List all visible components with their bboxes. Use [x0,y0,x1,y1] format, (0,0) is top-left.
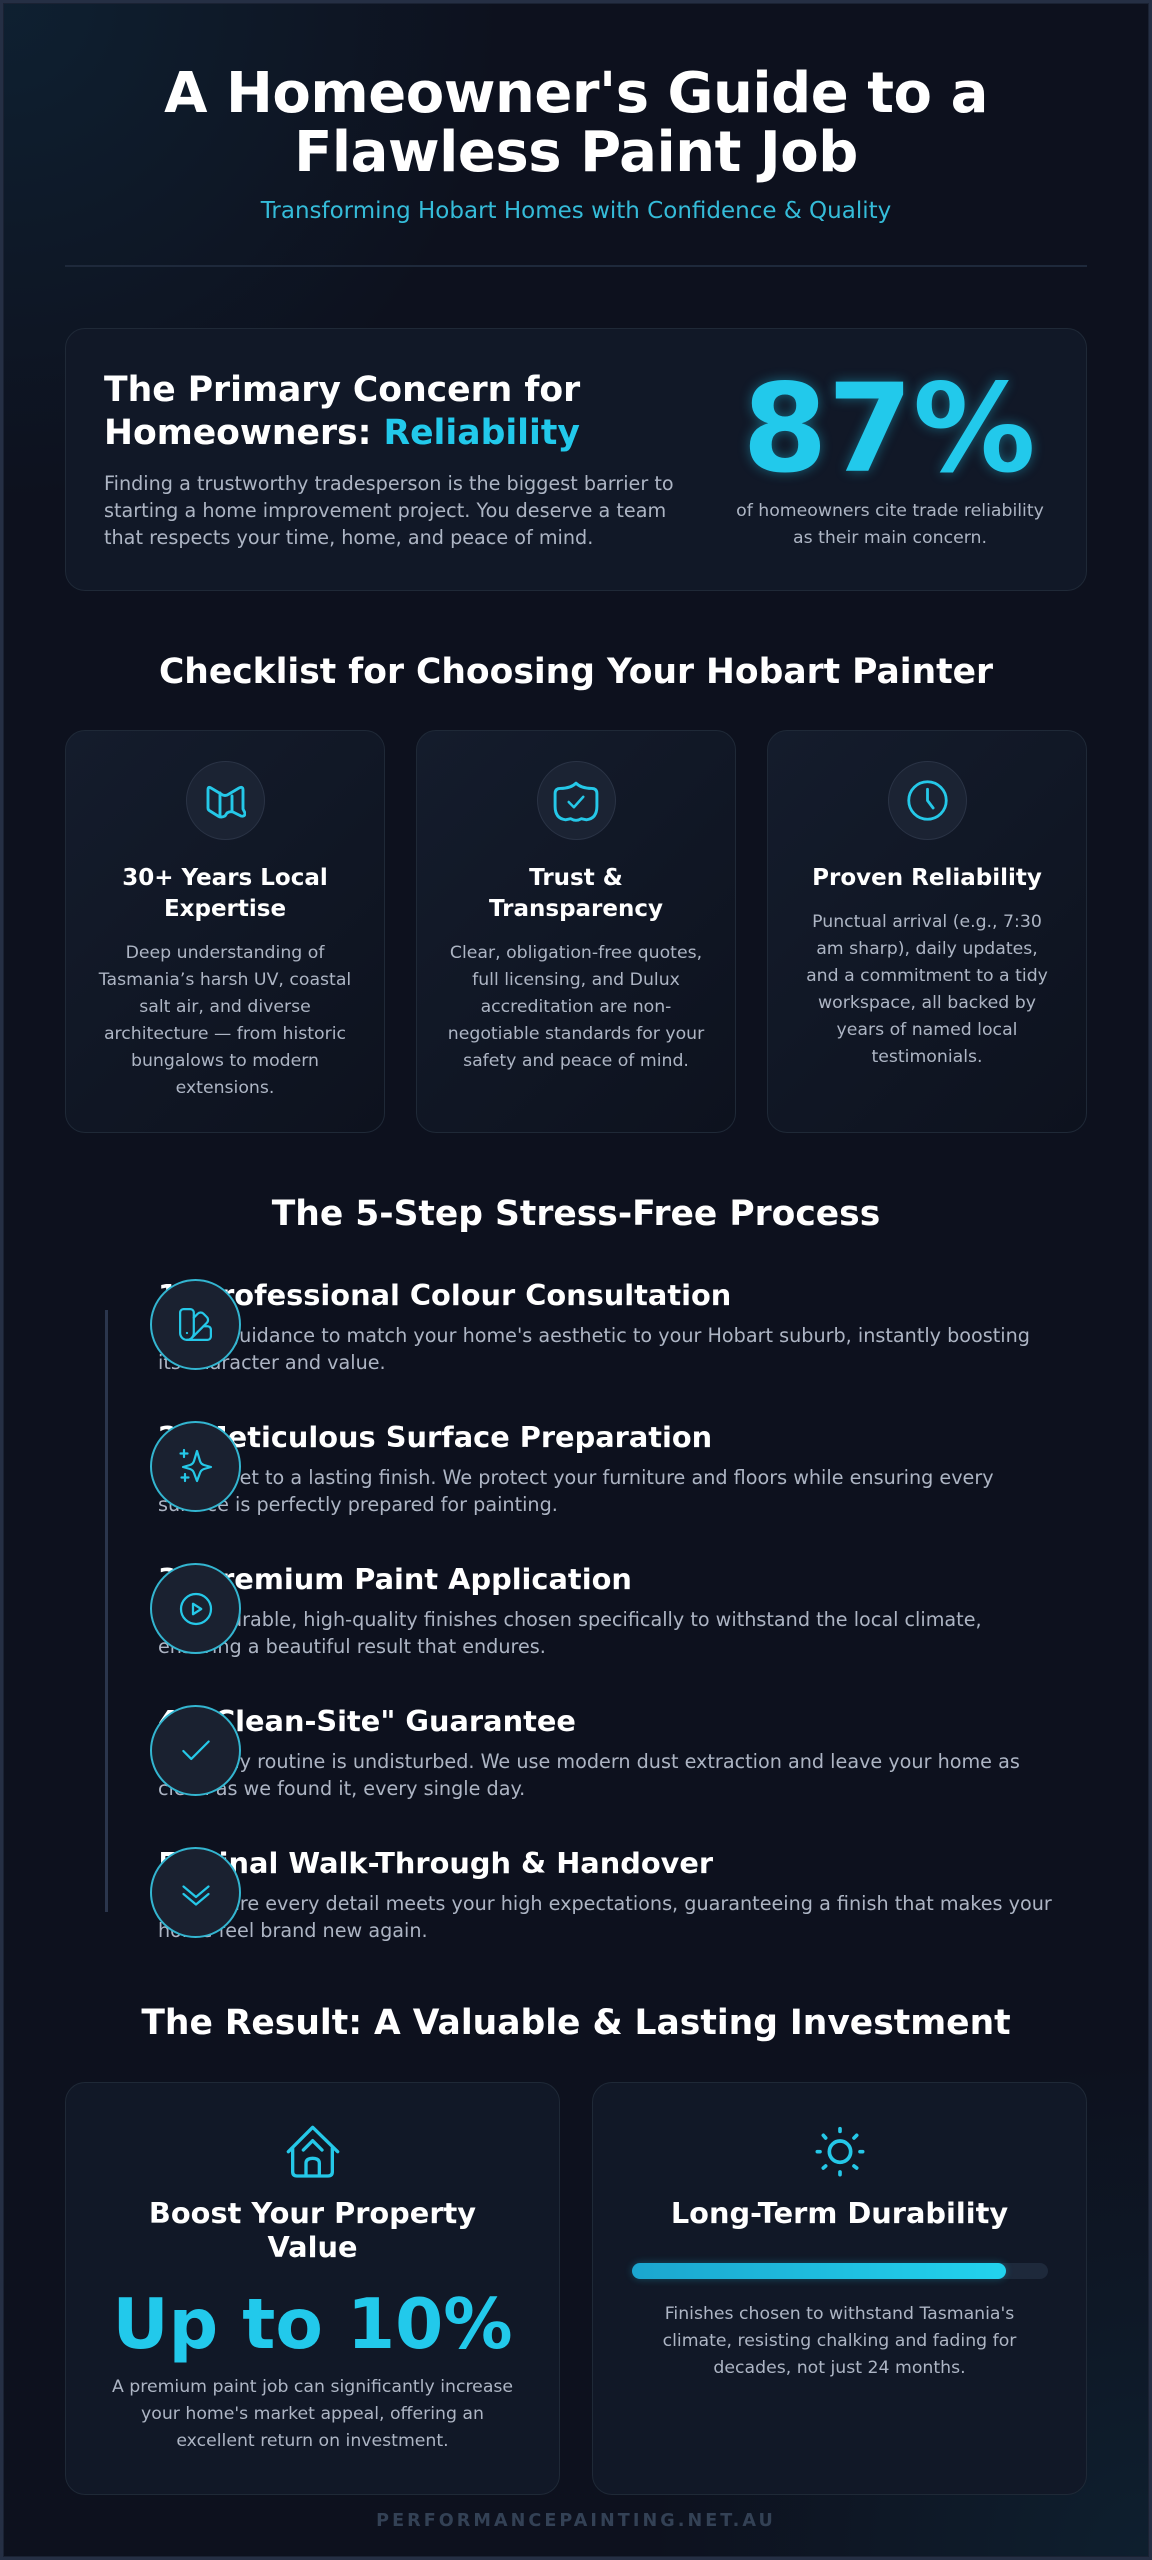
text: expertise description: Tasmania’s harsh UV, coastal [99,970,351,990]
panel: reliability card [767,730,1087,1133]
step 4 text: clean as we found it, every single day. [158,1777,525,1800]
text: trust description: safety and peace of mind. [463,1051,689,1071]
step 4 [150,1704,1020,1800]
text: expertise title [122,865,328,922]
durability title: Long-Term Durability [671,2196,1008,2230]
icon: map [186,761,265,840]
step 4 title: 4. "Clean-Site" Guarantee [158,1704,576,1738]
text: reliability description: years of named local [837,1020,1017,1040]
durability bar [632,2263,1048,2279]
step 2 icon: sparkles [150,1421,241,1512]
step 5 text: We ensure every detail meets your high expectations, guaranteeing a finish that makes your [158,1892,1052,1915]
panel: durability [592,2082,1087,2495]
step 4 icon: check [150,1705,241,1796]
property value title [149,2196,476,2264]
step 2 text [158,1466,994,1516]
title: A Homeowner's Guide to a [164,61,988,126]
text: expertise description [98,943,351,1098]
text: trust description: Clear, obligation-free quotes, [450,943,702,963]
step 3 text: ensuring a beautiful result that endures. [158,1635,546,1658]
stat: up to 10%: Up to 10% [112,2285,513,2365]
stat caption: as their main concern. [793,528,987,548]
text: expertise title: Expertise [164,896,286,922]
title: Flawless Paint Job [294,120,858,185]
step 1 title: 1. Professional Colour Consultation [158,1278,731,1312]
title [164,61,988,185]
heading: result: The Result: A Valuable & Lasting Investment [141,2003,1011,2043]
text: trust description: accreditation are non- [481,997,671,1017]
step 5 [150,1846,1052,1942]
panel: local expertise card [65,730,385,1133]
property value text: excellent return on investment. [176,2431,449,2451]
text: trust description: negotiable standards for your [448,1024,704,1044]
heading: checklist: Checklist for Choosing Your Hobart Painter [159,652,993,692]
step 3 [150,1562,982,1658]
text: expertise title: 30+ Years Local [122,865,328,891]
property value text [112,2377,513,2451]
icon: clock [888,761,967,840]
text: trust title: Trust & [529,865,623,891]
durability text: Finishes chosen to withstand Tasmania's [665,2304,1014,2324]
panel: trust card [416,730,736,1133]
step 5 text: home feel brand new again. [158,1919,428,1942]
step 1 text: Expert guidance to match your home's aesthetic to your Hobart suburb, instantly boosting [158,1324,1030,1347]
text: primary concern body: Finding a trustworthy tradesperson is the biggest barrier to [104,472,674,495]
stat: 87%: 87% [742,357,1036,500]
step 2 text: surface is perfectly prepared for painting. [158,1493,558,1516]
text: reliability description: am sharp), daily updates, [816,939,1038,959]
heading: process: The 5-Step Stress-Free Process [272,1194,880,1234]
step 5 icon: chevrons down [150,1847,241,1938]
step 4 text [158,1750,1020,1800]
durability text: decades, not just 24 months. [713,2358,966,2378]
text: reliability description: and a commitment to a tidy [806,966,1048,986]
durability text: climate, resisting chalking and fading for [663,2331,1016,2351]
step 1 text [158,1324,1030,1374]
heading: primary concern [104,370,580,452]
text: trust description [448,943,704,1071]
subtitle: Transforming Hobart Homes with Confidence & Quality [261,198,891,224]
property value text: your home's market appeal, offering an [141,2404,484,2424]
text: expertise description: Deep understanding of [126,943,324,963]
panel: primary concern [65,328,1087,591]
step 3 title: 3. Premium Paint Application [158,1562,632,1596]
property value title: Boost Your Property [149,2196,476,2230]
step 5 title: 5. Final Walk-Through & Handover [158,1846,713,1880]
step 2 text: The secret to a lasting finish. We protect your furniture and floors while ensuring every [158,1466,994,1489]
panel: property value [65,2082,560,2495]
text: reliability description [806,912,1048,1067]
stat caption [736,501,1044,548]
durability text [663,2304,1016,2378]
step 3 text [158,1608,982,1658]
text: reliability title: Proven Reliability [812,865,1042,891]
step 2 title: 2. Meticulous Surface Preparation [158,1420,712,1454]
text: primary concern body [104,472,674,549]
step 2 [150,1420,994,1516]
text: primary concern body: starting a home improvement project. You deserve a team [104,499,666,522]
icon: house [286,2126,340,2178]
text: expertise description: salt air, and diverse [139,997,311,1017]
step 1 [150,1278,1030,1374]
footer: PERFORMANCEPAINTING.NET.AU [376,2511,776,2531]
step 5 text [158,1892,1052,1942]
step 3 text: Using durable, high-quality finishes chosen specifically to withstand the local climate, [158,1608,982,1631]
text: expertise description: extensions. [176,1078,274,1098]
property value text: A premium paint job can significantly increase [112,2377,513,2397]
step 3 icon: circle play [150,1563,241,1654]
heading: primary concern: Homeowners: Reliability [104,412,580,452]
text: trust title: Transparency [489,896,663,922]
text: reliability description: testimonials. [871,1047,983,1067]
property value title: Value [267,2230,358,2264]
step 1 icon: swatch book [150,1279,241,1370]
text: reliability description: workspace, all backed by [818,993,1036,1013]
icon: shield check [537,761,616,840]
stat caption: of homeowners cite trade reliability [736,501,1044,521]
text: primary concern body: that respects your time, home, and peace of mind. [104,526,593,549]
step 4 text: Your daily routine is undisturbed. We use modern dust extraction and leave your home as [158,1750,1020,1773]
text: trust description: full licensing, and Dulux [472,970,680,990]
text: expertise description: bungalows to modern [131,1051,319,1071]
text: trust title [489,865,663,922]
text: reliability description: Punctual arrival (e.g., 7:30 [812,912,1042,932]
heading: primary concern: The Primary Concern for [104,370,580,410]
text: expertise description: architecture — from historic [104,1024,346,1044]
step 1 text: its character and value. [158,1351,386,1374]
icon: sun [816,2126,864,2176]
